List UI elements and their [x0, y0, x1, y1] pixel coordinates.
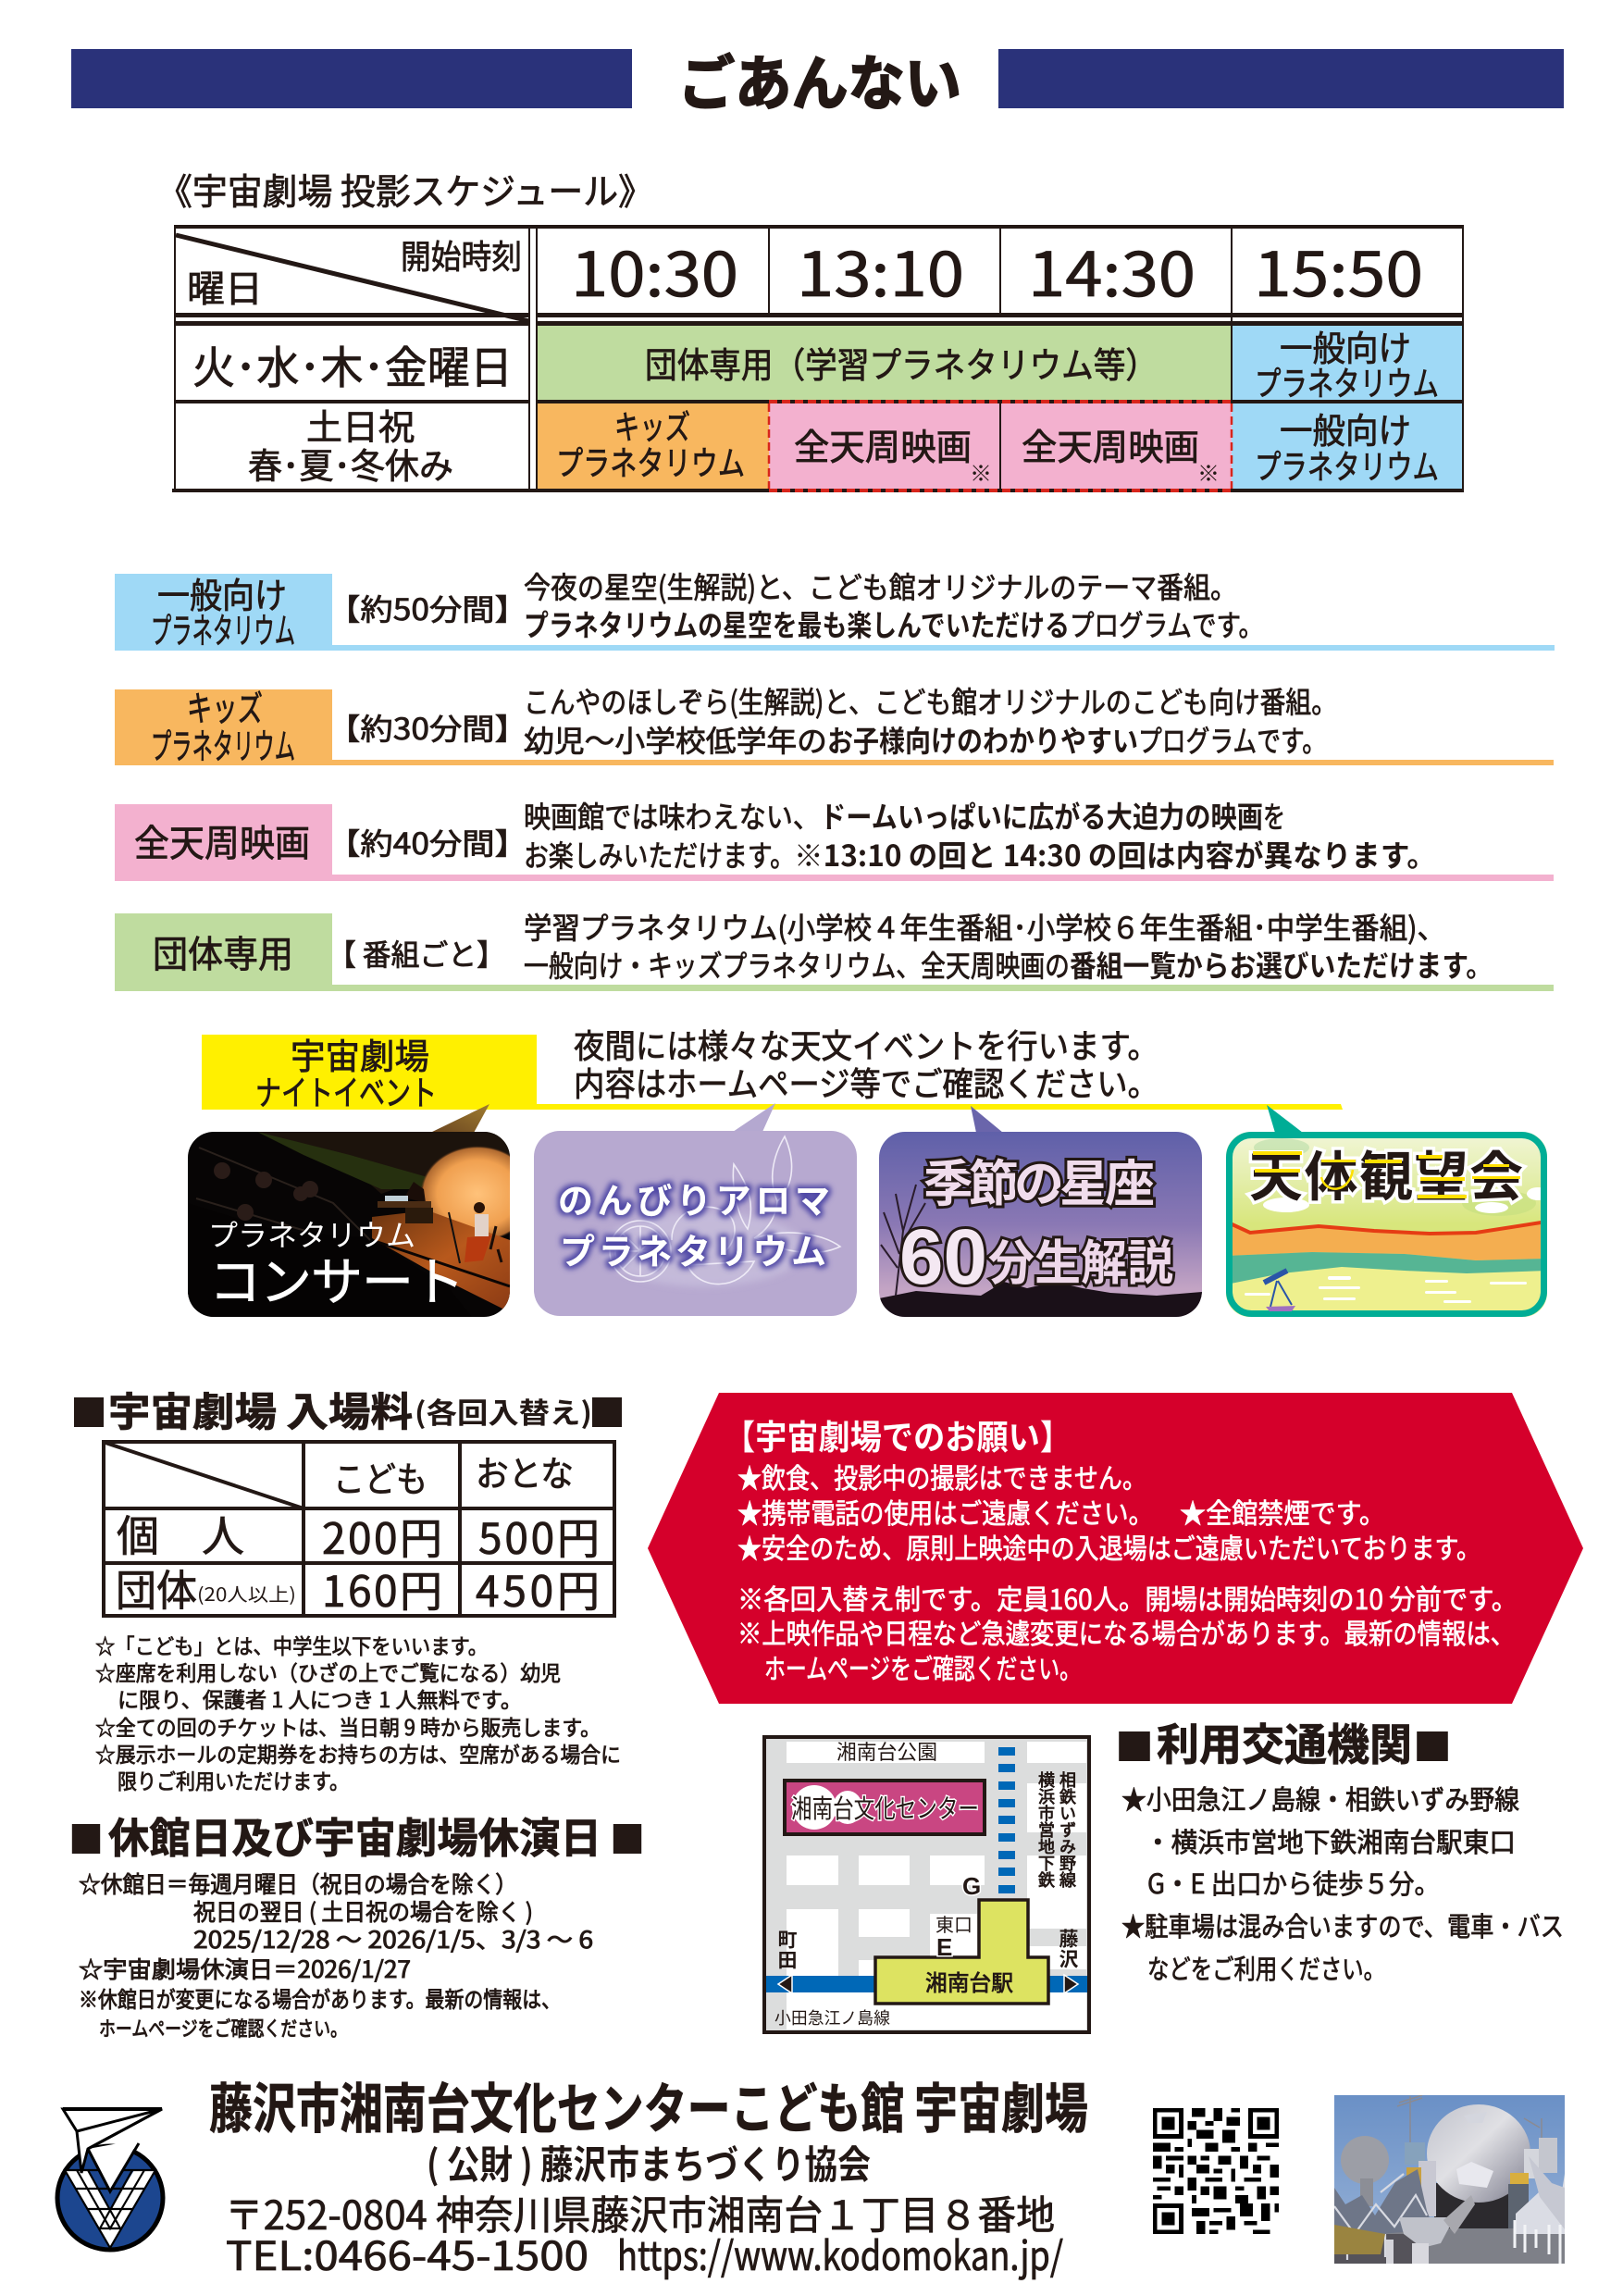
- map labels: 東口: [935, 1910, 973, 1937]
- panel: general planetarium: プラネタリウムの星空を最も楽しんでいただける: [524, 602, 1070, 645]
- rail line: [766, 1976, 1087, 1992]
- cultural centre building: [785, 1781, 985, 1834]
- orange band: [1233, 1224, 1541, 1260]
- admission table: おとな: [476, 1446, 574, 1496]
- card: seasonal constellations: 分生解説: [988, 1224, 1173, 1294]
- schedule table: 曜日: [187, 259, 263, 313]
- panel: full dome film: [115, 794, 1554, 881]
- admission notes: に限り、保護者 1 人につき 1 人無料です。: [118, 1682, 522, 1714]
- map labels: 藤沢: [1055, 1929, 1083, 1969]
- panel: kids planetarium: こんやのほしぞら(生解説)と、こども館オリジナルのこども向け番組。: [524, 679, 1337, 722]
- card: planetarium concert: プラネタリウム: [208, 1212, 415, 1255]
- panel: full dome film: お楽しみいただけます。: [524, 833, 795, 875]
- panel: full dome film: ドームいっぱいに広がる大迫力の映画: [820, 794, 1263, 837]
- heading: admission: [70, 1381, 626, 1438]
- transport text: ・横浜市営地下鉄湘南台駅東口: [1145, 1821, 1516, 1860]
- QR code: [1153, 2108, 1279, 2234]
- map labels: E: [936, 1933, 952, 1961]
- panel: general planetarium: プラネタリウム: [151, 602, 295, 653]
- panel: requests: ★飲食、投影中の撮影はできません。: [737, 1456, 1146, 1496]
- panel: night events banner: 宇宙劇場: [291, 1028, 429, 1079]
- heading: closed days: ■: [68, 1810, 104, 1864]
- map labels: 相鉄いずみ野線: [1056, 1771, 1080, 1888]
- logo: [57, 2109, 163, 2250]
- transport text: などをご利用ください。: [1147, 1948, 1385, 1987]
- heading: closed days: ■: [610, 1810, 645, 1864]
- closed days text: ☆宇宙劇場休演日＝2026/1/27: [79, 1952, 411, 1985]
- transport text: ★駐車場は混み合いますので、電車・バス: [1121, 1905, 1564, 1944]
- admission notes: ☆座席を利用しない（ひざの上でご覧になる）幼児: [95, 1656, 561, 1687]
- row labels: 土日祝: [306, 399, 415, 450]
- panel: kids planetarium: プラネタリウム: [151, 718, 295, 769]
- footer organisation text: ( 公財 ) 藤沢市まちづくり協会: [427, 2134, 871, 2191]
- panel: night events banner: ナイトイベント: [255, 1065, 437, 1115]
- start times: 14:30: [1028, 226, 1196, 315]
- diagonal: [176, 235, 529, 321]
- panel: full dome film: ※13:10 の回と 14:30 の回は内容が異なります。: [794, 833, 1436, 875]
- closed days text: ※休館日が変更になる場合があります。最新の情報は、: [79, 1981, 561, 2014]
- closed days text: [79, 1867, 593, 2042]
- pale lower band: [1226, 1266, 1547, 1317]
- panel: full dome film: 【約40分間】: [328, 821, 527, 863]
- icon: aroma leaves and citrus: [610, 1136, 840, 1285]
- panel: group only: 学習プラネタリウム(小学校４年生番組･小学校６年生番組･中学生番組)、: [524, 905, 1445, 948]
- red dashed frame: [769, 402, 1232, 490]
- subway stops: [998, 1747, 1015, 1893]
- row labels: 火･水･木･金曜日: [192, 331, 513, 396]
- panel: full dome film: を: [1263, 794, 1285, 837]
- programme cells: プラネタリウム: [1255, 441, 1439, 489]
- admission notes: ☆全ての回のチケットは、当日朝 9 時から販売します。: [95, 1710, 601, 1742]
- building photo: [1334, 2095, 1565, 2264]
- panel: group only: 【 番組ごと】: [328, 932, 505, 974]
- card: planetarium concert: [188, 1104, 535, 1317]
- musician at keyboard: [378, 1182, 433, 1223]
- admission table: 個: [117, 1503, 159, 1564]
- start times: [571, 226, 1423, 315]
- admission table: 団体: [116, 1558, 197, 1619]
- map labels: 湘南台公園: [836, 1736, 937, 1766]
- admission notes: [95, 1629, 621, 1795]
- closed days text: 祝日の翌日 ( 土日祝の場合を除く ): [193, 1894, 533, 1928]
- programme cells: キッズ: [614, 401, 690, 449]
- card: aroma planetarium: のんびりアロマ: [558, 1173, 830, 1223]
- panel: night events banner: [202, 1020, 1343, 1115]
- panel: full dome film: 全天周映画: [134, 813, 310, 867]
- transport text: [1121, 1779, 1564, 1987]
- panel: group only: 一般向け・キッズプラネタリウム、全天周映画の: [524, 943, 1070, 986]
- panel: group only: 団体専用: [153, 925, 293, 978]
- panel: night events banner: 内容はホームページ等でご確認ください。: [574, 1058, 1158, 1106]
- panel: general planetarium: 今夜の星空(生解説)と、こども館オリジナルのテーマ番組。: [524, 565, 1237, 607]
- admission notes: ☆「こども」とは、中学生以下をいいます。: [95, 1629, 488, 1660]
- heading: admission: ■: [588, 1384, 626, 1437]
- station: [875, 1900, 1048, 2004]
- panel: general planetarium: 【約50分間】: [328, 587, 527, 629]
- panel: requests: 【宇宙劇場でのお願い】: [724, 1409, 1072, 1459]
- musician with instrument: [449, 1202, 502, 1263]
- programme cells: ※: [970, 455, 992, 488]
- central sculpture: [1399, 2217, 1455, 2248]
- ground: [1334, 2228, 1565, 2264]
- admission table: 450円: [476, 1558, 600, 1620]
- footer organisation text: TEL:0466-45-1500: [226, 2225, 588, 2282]
- panel: general planetarium: 一般向け: [157, 567, 287, 618]
- heading: transport: ■: [1115, 1718, 1154, 1771]
- admission table: 200円: [322, 1506, 442, 1567]
- programme cells: 一般向け: [1280, 403, 1411, 453]
- panel: requests: ※各回入替え制です。定員160人。開場は開始時刻の10 分前です。: [737, 1577, 1518, 1618]
- panel: group only: 番組一覧からお選びいただけます。: [1070, 943, 1493, 986]
- card: star gazing: 天体観望会: [1249, 1134, 1523, 1211]
- programme cells: [556, 320, 1439, 489]
- programme cells: プラネタリウム: [1255, 357, 1439, 405]
- row labels: [192, 331, 513, 489]
- teal band: [1226, 1252, 1547, 1285]
- icon: telescope: [1264, 1271, 1295, 1311]
- panel: group only: [115, 905, 1554, 991]
- dark entrance: [1434, 2183, 1510, 2231]
- footer organisation text: 〒252-0804 神奈川県藤沢市湘南台１丁目８番地: [225, 2184, 1055, 2241]
- heading: closed days: 休館日及び宇宙劇場休演日: [108, 1805, 601, 1865]
- footer organisation text: 藤沢市湘南台文化センターこども館 宇宙劇場: [209, 2066, 1088, 2143]
- admission notes: 限りご利用いただけます。: [118, 1764, 349, 1795]
- closed days text: 2025/12/28 ～ 2026/1/5、3/3 ～ 6: [193, 1922, 593, 1955]
- map labels: [774, 1736, 1083, 2029]
- map labels: 町田: [774, 1930, 801, 1970]
- card: seasonal constellations: 季節の星座: [923, 1143, 1155, 1216]
- programme cells: 全天周映画: [794, 419, 972, 471]
- map: 湘南台文化センター: [791, 1789, 979, 1826]
- schedule table: [172, 225, 1464, 492]
- admission table: 人: [202, 1503, 244, 1564]
- cell fills: [538, 325, 1462, 489]
- start times: 15:50: [1254, 226, 1423, 315]
- cylinders: [1405, 2142, 1425, 2165]
- heading: admission: (各回入替え): [415, 1390, 592, 1432]
- card: aroma planetarium: プラネタリウム: [560, 1223, 826, 1274]
- admission table: 160円: [322, 1558, 442, 1620]
- left truss: [1334, 2169, 1434, 2253]
- map: [764, 1736, 1089, 2032]
- footer organisation text: https://www.kodomokan.jp/: [617, 2225, 1063, 2282]
- admission table: こども: [333, 1451, 427, 1502]
- panel: kids planetarium: 【約30分間】: [328, 706, 527, 749]
- panel: general planetarium: [115, 565, 1555, 653]
- panel: requests: [648, 1393, 1583, 1704]
- card: seasonal constellations: [879, 1106, 1202, 1317]
- programme cells: 全天周映画: [1022, 419, 1199, 471]
- antennas: [1397, 2095, 1542, 2143]
- transport text: G・E 出口から徒歩５分。: [1147, 1863, 1440, 1902]
- admission table: (20人以上): [197, 1580, 296, 1607]
- globe dome: [1427, 2104, 1530, 2203]
- programme cells: 一般向け: [1280, 320, 1411, 371]
- metal tree: [1341, 2136, 1389, 2184]
- card: star gazing: [1226, 1105, 1549, 1317]
- footer organisation text: [209, 2066, 1088, 2282]
- map labels: 横浜市営地下鉄: [1035, 1771, 1059, 1888]
- programme cells: ※: [1197, 455, 1220, 488]
- title: ごあんない: [678, 37, 961, 122]
- transport text: ★小田急江ノ島線・相鉄いずみ野線: [1121, 1779, 1519, 1818]
- panel: requests: ※上映作品や日程など急遽変更になる場合があります。最新の情報は、: [737, 1611, 1515, 1652]
- panel: requests: ★全館禁煙です。: [1180, 1491, 1385, 1532]
- panel: requests: ★携帯電話の使用はご遠慮ください。: [737, 1491, 1153, 1532]
- panel: kids planetarium: [115, 679, 1554, 769]
- row labels: 春･夏･冬休み: [248, 438, 453, 489]
- right white trusses: [1516, 2174, 1565, 2234]
- card: planetarium concert: コンサート: [209, 1241, 465, 1316]
- start times: 10:30: [571, 226, 738, 315]
- programme cells: プラネタリウム: [556, 437, 745, 485]
- panel: kids planetarium: プログラムです。: [1138, 718, 1326, 761]
- card: seasonal constellations: 60: [899, 1213, 987, 1300]
- panel: night events banner: 夜間には様々な天文イベントを行います。: [574, 1020, 1158, 1068]
- schedule heading: 《宇宙劇場 投影スケジュール》: [157, 164, 653, 216]
- map: 湘南台駅: [925, 1965, 1013, 1997]
- admission notes: ☆展示ホールの定期券をお持ちの方は、空席がある場合に: [95, 1737, 621, 1769]
- admission table: 500円: [478, 1506, 600, 1567]
- panel: kids planetarium: 幼児～小学校低学年の: [524, 718, 827, 761]
- heading: admission: ■: [70, 1384, 107, 1437]
- programme cells: 団体専用（学習プラネタリウム等）: [645, 337, 1158, 388]
- heading: admission: 宇宙劇場 入場料: [108, 1381, 413, 1438]
- start times: 13:10: [797, 226, 964, 315]
- heading: transport: 利用交通機関: [1157, 1709, 1412, 1773]
- panel: kids planetarium: お子様向けのわかりやすい: [827, 718, 1138, 761]
- map labels: 小田急江ノ島線: [774, 2005, 890, 2029]
- map labels: G: [962, 1872, 981, 1900]
- panel: requests: ホームページをご確認ください。: [764, 1646, 1081, 1687]
- panel: requests: ★安全のため、原則上映途中の入退場はご遠慮いただいております。: [737, 1526, 1481, 1567]
- header labels: 開始時刻: [401, 230, 522, 279]
- card: aroma planetarium: [534, 1103, 857, 1316]
- closed days text: ホームページをご確認ください。: [99, 2013, 347, 2042]
- panel: kids planetarium: キッズ: [187, 680, 263, 731]
- heading: transport: ■: [1413, 1718, 1452, 1771]
- admission table: [104, 1442, 614, 1620]
- panel: general planetarium: プログラムです。: [1070, 602, 1263, 645]
- header band: [71, 37, 1564, 122]
- panel: full dome film: 映画館では味わえない、: [524, 794, 820, 837]
- closed days text: ☆休館日＝毎週月曜日（祝日の場合を除く）: [79, 1867, 517, 1900]
